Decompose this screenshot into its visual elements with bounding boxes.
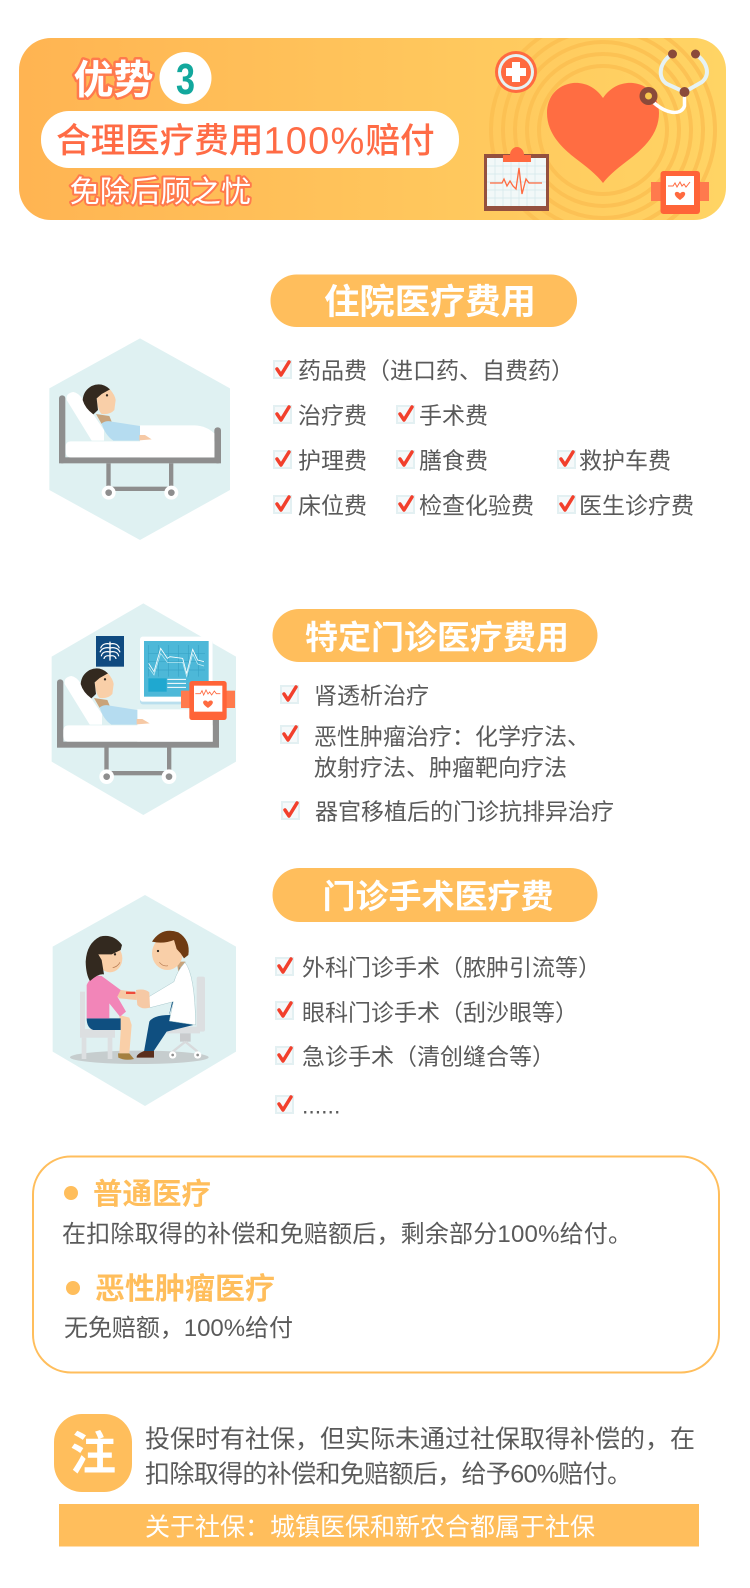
heading pill: 特定门诊医疗费用 bbox=[305, 619, 569, 656]
heading pill bbox=[272, 609, 598, 662]
icon: clipboard bbox=[484, 147, 549, 211]
illustration: doctor and patient bbox=[53, 895, 236, 1106]
section 3: outpatient surgery costs bbox=[53, 868, 601, 1118]
note badge bbox=[54, 1414, 132, 1492]
concentric rings bbox=[489, 38, 717, 220]
man bbox=[126, 931, 196, 1058]
icon: heart bbox=[547, 83, 659, 183]
badge: number 3: 3 bbox=[176, 55, 195, 104]
heading pill: 住院医疗费用 bbox=[324, 283, 536, 322]
illustration: patient in bed bbox=[49, 338, 230, 540]
bullet: malignant bbox=[66, 1281, 80, 1295]
note text bbox=[145, 1426, 695, 1488]
pill: reasonable medical expenses bbox=[41, 111, 459, 168]
section 2: specific outpatient costs bbox=[52, 603, 614, 824]
checklist bbox=[273, 358, 694, 518]
heading pill: 门诊手术医疗费 bbox=[322, 878, 554, 915]
banner panel bbox=[19, 38, 726, 220]
note text: 扣除取得的补偿和免赔额后，给予60%赔付。 bbox=[145, 1460, 632, 1488]
panel: payout rules bbox=[33, 1156, 719, 1372]
icon: heart monitor bbox=[651, 171, 709, 214]
heading pill bbox=[270, 274, 577, 327]
note text: 投保时有社保，但实际未通过社保取得补偿的，在 bbox=[145, 1426, 695, 1454]
checklist bbox=[280, 682, 614, 824]
icon: stethoscope bbox=[640, 50, 707, 112]
band: social insurance definition: 关于社保：城镇医保和新农合都属于社保 bbox=[145, 1514, 595, 1542]
text: malignant rule: 无免赔额，100%给付 bbox=[64, 1315, 293, 1342]
checklist: 外科门诊手术（脓肿引流等） bbox=[302, 954, 601, 980]
checklist: 护理费 bbox=[298, 448, 367, 474]
heading pill bbox=[272, 868, 598, 922]
checklist bbox=[275, 954, 601, 1118]
checklist: 放射疗法、肿瘤靶向疗法 bbox=[314, 754, 567, 780]
pill: reasonable medical expenses: 合理医疗费用100%赔付 bbox=[56, 120, 435, 162]
checklist: 手术费 bbox=[419, 402, 488, 428]
checklist: 肾透析治疗 bbox=[314, 682, 429, 708]
checklist: ...... bbox=[302, 1092, 340, 1118]
checklist: 膳食费 bbox=[419, 448, 488, 474]
checklist: 恶性肿瘤治疗：化学疗法、 bbox=[314, 724, 590, 750]
heading: malignant tumor: 恶性肿瘤医疗 bbox=[95, 1273, 275, 1306]
checklist: 检查化验费 bbox=[419, 492, 534, 518]
monitor bbox=[140, 637, 213, 704]
heart monitor bbox=[181, 681, 235, 720]
note badge: 注 bbox=[70, 1428, 116, 1480]
heading: advantage 3: 优势 bbox=[74, 58, 154, 102]
section 1: inpatient medical costs bbox=[49, 274, 694, 540]
subheading: 免除后顾之忧 bbox=[70, 175, 251, 209]
icon: medical cross bbox=[495, 51, 537, 93]
checklist: 医生诊疗费 bbox=[579, 492, 694, 518]
band: social insurance definition bbox=[59, 1504, 699, 1546]
checklist: 器官移植后的门诊抗排异治疗 bbox=[315, 798, 614, 824]
checklist: 救护车费 bbox=[579, 448, 671, 474]
heading: ordinary medical: 普通医疗 bbox=[93, 1178, 211, 1211]
badge: number 3 bbox=[160, 52, 212, 104]
note bbox=[54, 1414, 699, 1546]
text: ordinary rule: 在扣除取得的补偿和免赔额后，剩余部分100%给付。 bbox=[62, 1221, 632, 1248]
checklist: 药品费（进口药、自费药） bbox=[298, 358, 574, 384]
checklist: 急诊手术（清创缝合等） bbox=[302, 1044, 555, 1070]
woman bbox=[86, 936, 137, 1060]
checklist: 床位费 bbox=[298, 492, 367, 518]
checklist: 治疗费 bbox=[298, 402, 367, 428]
x-ray bbox=[96, 636, 124, 667]
bullet: ordinary bbox=[64, 1186, 78, 1200]
checklist: 眼科门诊手术（刮沙眼等） bbox=[302, 1000, 578, 1026]
illustration: patient with monitor bbox=[52, 603, 236, 815]
